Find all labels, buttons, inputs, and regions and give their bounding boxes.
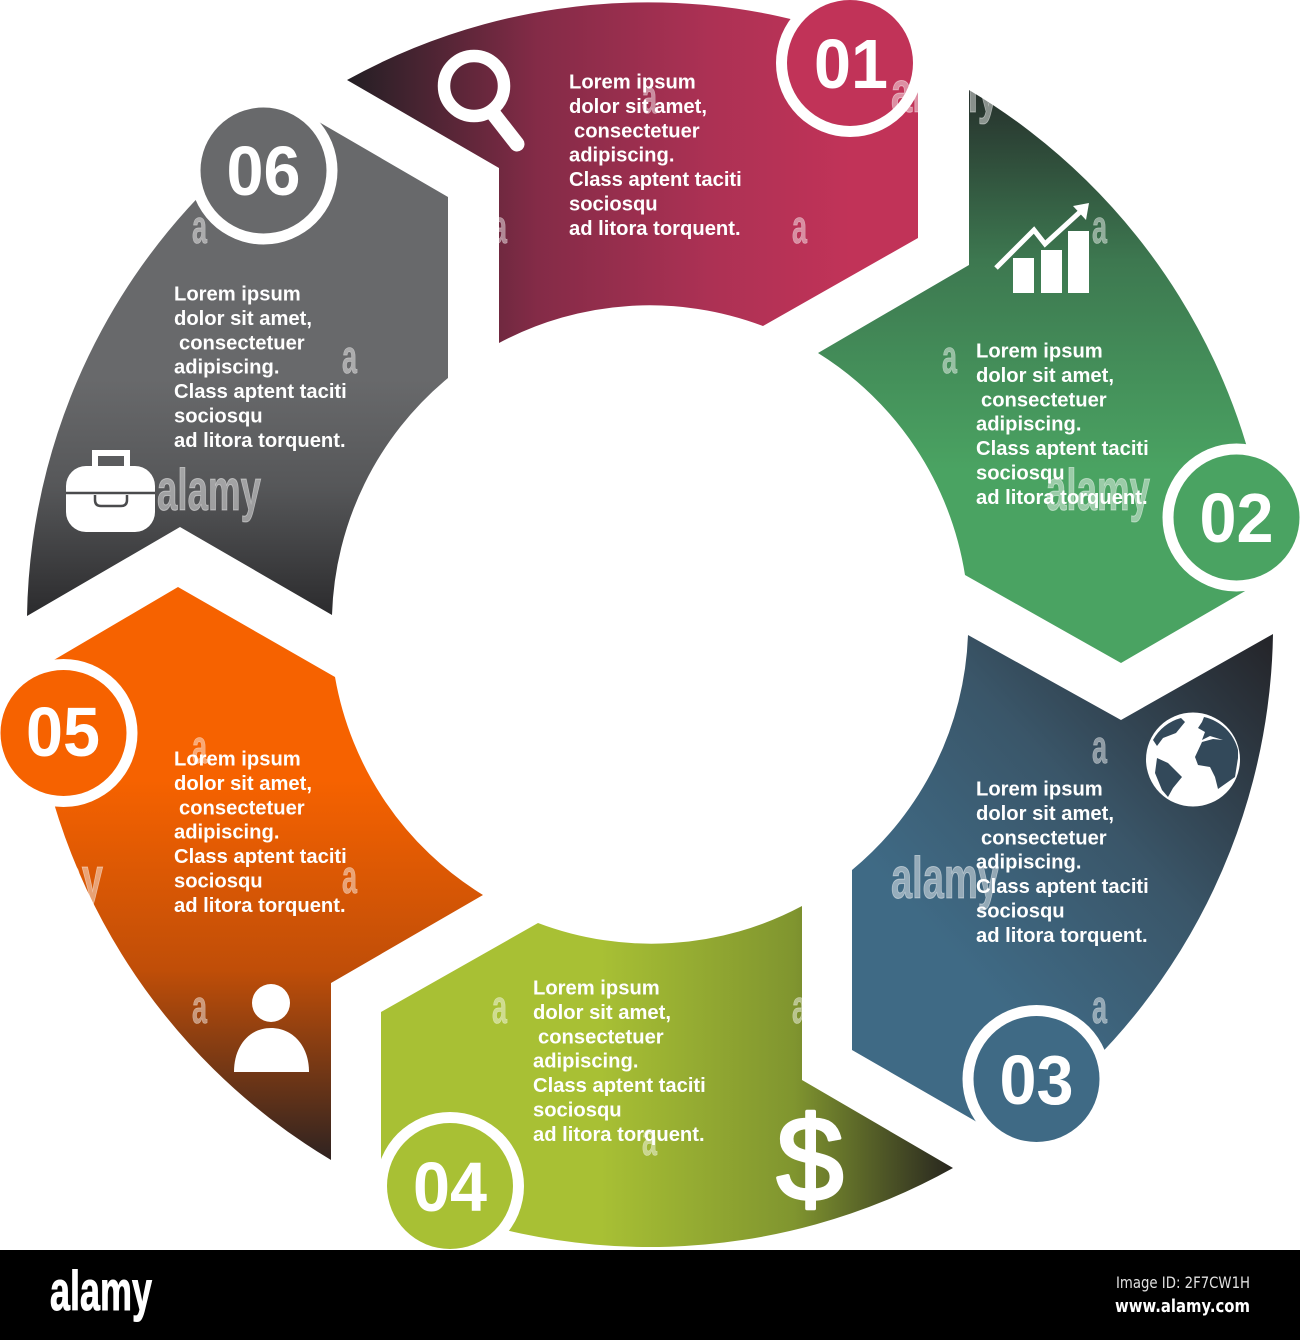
text block 04: sociosqu — [533, 1100, 622, 1122]
text block 02: adipiscing. — [976, 414, 1081, 436]
text block 06: Class aptent taciti — [174, 381, 347, 403]
text block 06: sociosqu — [174, 406, 263, 428]
watermark: a — [192, 980, 207, 1033]
badge 05: 05 — [26, 693, 100, 771]
watermark: a — [1092, 200, 1107, 253]
panel: step 04 — [381, 906, 953, 1247]
text block 02: Class aptent taciti — [976, 438, 1149, 460]
text block 01: consectetuer — [574, 120, 700, 142]
text block 05: consectetuer — [179, 797, 305, 819]
text block 05: ad litora torquent. — [174, 895, 346, 917]
text block 04: consectetuer — [538, 1026, 664, 1048]
text block 05: dolor sit amet, — [174, 773, 312, 795]
text block 02: sociosqu — [976, 462, 1065, 484]
watermark: alamy — [157, 458, 261, 523]
watermark: a — [342, 330, 357, 383]
text block 05: Class aptent taciti — [174, 846, 347, 868]
text block 04: Lorem ipsum — [533, 978, 660, 1000]
text block 06: Lorem ipsum — [174, 284, 301, 306]
text block 01: Class aptent taciti — [569, 169, 742, 191]
panel: step 05 — [30, 587, 483, 1160]
text block 02: Lorem ipsum — [976, 340, 1103, 362]
panel: step 06 — [27, 111, 448, 616]
text block 03: dolor sit amet, — [976, 803, 1114, 825]
badge 04: 04 — [413, 1148, 487, 1226]
badge 05 — [0, 659, 138, 807]
segment shape 03 — [852, 634, 1273, 1137]
text block 01: sociosqu — [569, 194, 658, 216]
icon: dollar sign: $ — [777, 1092, 843, 1226]
icon: person — [234, 984, 309, 1072]
badge 01 — [776, 0, 924, 137]
badge 02 — [1162, 444, 1300, 592]
watermark: a — [192, 200, 207, 253]
watermark: a — [642, 70, 657, 123]
watermark: alamy — [891, 846, 999, 911]
watermark: a — [492, 980, 507, 1033]
badge 02: 02 — [1200, 479, 1274, 557]
text block 01: dolor sit amet, — [569, 96, 707, 118]
panel: step 01 — [347, 2, 918, 343]
watermark: a — [192, 720, 207, 773]
text block 06: consectetuer — [179, 332, 305, 354]
watermark: alamy — [891, 60, 999, 125]
watermark — [0, 60, 1150, 1165]
text block 04: ad litora torquent. — [533, 1124, 705, 1146]
segment shape 04 — [381, 906, 953, 1247]
icon: magnifier — [444, 56, 517, 144]
watermark: a — [492, 200, 507, 253]
text block 03: ad litora torquent. — [976, 925, 1148, 947]
segment shape 05 — [30, 587, 483, 1160]
text block 01: Lorem ipsum — [569, 72, 696, 94]
watermark: a — [792, 200, 807, 253]
text block 03: adipiscing. — [976, 852, 1081, 874]
watermark: a — [1092, 980, 1107, 1033]
footer logo: alamy — [50, 1259, 152, 1322]
text block 06: dolor sit amet, — [174, 308, 312, 330]
text block 04: dolor sit amet, — [533, 1002, 671, 1024]
panel: step 03 — [852, 634, 1273, 1137]
text block 05: sociosqu — [174, 870, 263, 892]
text block 03: sociosqu — [976, 900, 1065, 922]
watermark: a — [642, 1112, 657, 1165]
text block 01: ad litora torquent. — [569, 218, 741, 240]
icon: globe — [1146, 712, 1240, 806]
watermark: a — [792, 980, 807, 1033]
badge 03: 03 — [1000, 1041, 1074, 1119]
icon: growth chart — [996, 203, 1089, 293]
watermark: a — [342, 850, 357, 903]
watermark: alamy — [1046, 458, 1150, 523]
badge 06 — [190, 96, 338, 244]
segment shape 01 — [347, 2, 918, 343]
segment shape 02 — [818, 90, 1271, 663]
text block 04: adipiscing. — [533, 1051, 638, 1073]
text block 04: Class aptent taciti — [533, 1075, 706, 1097]
badge 03 — [962, 1005, 1110, 1153]
badge 01: 01 — [814, 25, 888, 103]
text block 03: Lorem ipsum — [976, 778, 1103, 800]
footer image id: Image ID: 2F7CW1H — [1116, 1273, 1250, 1292]
text block 05: Lorem ipsum — [174, 748, 301, 770]
text block 05: adipiscing. — [174, 822, 279, 844]
footer website: www.alamy.com — [1115, 1296, 1250, 1317]
footer bar — [0, 1250, 1300, 1340]
watermark: a — [1092, 720, 1107, 773]
panel: step 02 — [818, 90, 1271, 663]
text block 02: consectetuer — [981, 389, 1107, 411]
text block 01: adipiscing. — [569, 145, 674, 167]
text block 06: adipiscing. — [174, 357, 279, 379]
watermark: a — [942, 330, 957, 383]
text block 02: dolor sit amet, — [976, 365, 1114, 387]
text block 03: Class aptent taciti — [976, 876, 1149, 898]
text block 06: ad litora torquent. — [174, 430, 346, 452]
segment shape 06 — [27, 111, 448, 616]
badge 04 — [376, 1112, 524, 1260]
text block 02: ad litora torquent. — [976, 487, 1148, 509]
icon: briefcase — [66, 453, 155, 532]
badge 06: 06 — [226, 132, 300, 210]
text block 03: consectetuer — [981, 827, 1107, 849]
